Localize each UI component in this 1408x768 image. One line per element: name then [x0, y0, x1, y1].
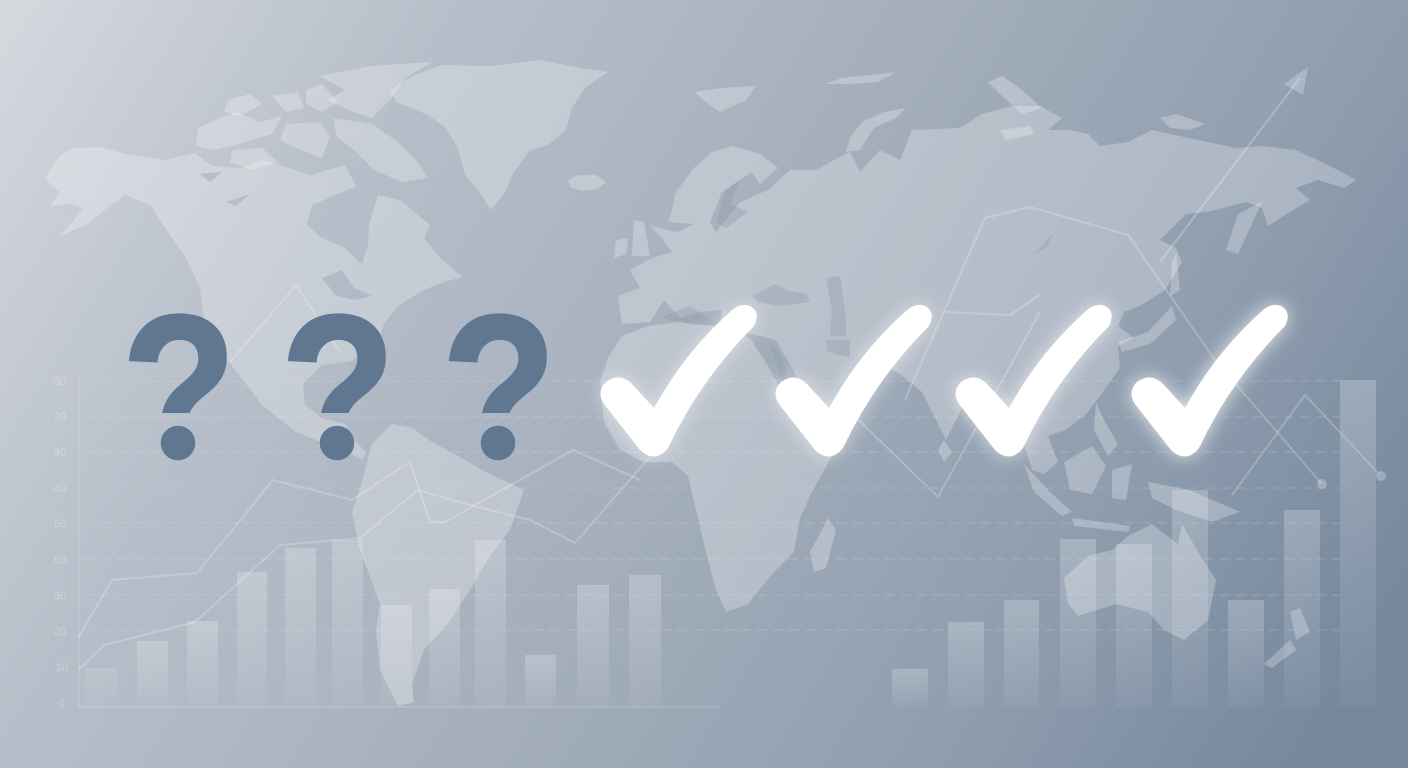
Africa	[600, 322, 846, 612]
Lake Baikal	[1034, 232, 1054, 254]
seas and lakes on the map	[200, 172, 1210, 404]
right zigzag line	[1232, 395, 1380, 495]
check marks	[600, 305, 1288, 457]
question mark 1	[128, 313, 227, 460]
left lower trend line	[78, 445, 660, 670]
Australia	[1064, 524, 1216, 640]
Iceland	[568, 175, 606, 191]
axis labels: 40	[54, 447, 66, 459]
check mark 2	[775, 305, 932, 457]
axis labels	[54, 376, 68, 710]
Baltic Sea	[716, 180, 748, 228]
question marks	[128, 313, 547, 460]
check mark 3	[955, 305, 1112, 457]
left upper trend line	[78, 450, 640, 638]
axis labels: 30	[54, 590, 66, 602]
left bar chart	[85, 540, 661, 707]
North America	[45, 147, 462, 460]
Eurasia	[618, 106, 1356, 474]
New Zealand	[1290, 608, 1310, 640]
right bar chart	[892, 380, 1376, 707]
Madagascar	[810, 518, 836, 572]
question mark 2: ?	[281, 271, 395, 510]
Japan	[1118, 306, 1176, 352]
axis labels: 20	[54, 411, 66, 423]
axis labels: 60	[54, 554, 66, 566]
South America	[352, 424, 524, 706]
Franz Josef islands	[824, 72, 896, 84]
axis labels: 20	[54, 626, 66, 638]
Great Slave Lake	[226, 194, 250, 206]
trend lines	[78, 207, 1380, 670]
question mark 3	[448, 313, 547, 460]
question mark 1: ?	[122, 271, 236, 510]
axis labels: 60	[54, 518, 66, 530]
check mark 4	[1131, 305, 1288, 457]
chart grid	[84, 381, 1340, 630]
check mark 1	[600, 305, 757, 457]
Black Sea	[752, 284, 810, 306]
Indonesia	[1024, 464, 1072, 516]
Svalbard	[694, 86, 756, 112]
upper small peak line	[230, 285, 340, 362]
Great Bear Lake	[200, 172, 222, 182]
axis labels: 30	[54, 376, 66, 388]
question mark 3: ?	[442, 271, 556, 510]
Sea of Okhotsk shadow	[1168, 212, 1210, 236]
axis labels: 0	[59, 698, 65, 710]
small inner line	[945, 295, 1040, 315]
question mark 2	[288, 313, 386, 460]
Arctic coast island Vaygach	[1000, 126, 1034, 140]
Mediterranean	[660, 306, 752, 334]
growth arrow	[1160, 67, 1308, 262]
Philippines	[1094, 402, 1118, 456]
Great Lakes	[322, 270, 372, 300]
Arctic islands	[196, 62, 432, 182]
Great Britain and Ireland	[632, 220, 650, 256]
Siberian islands	[988, 76, 1042, 114]
Greenland	[390, 60, 608, 210]
line end dots	[1317, 471, 1386, 489]
axis labels: 40	[54, 483, 66, 495]
central valley line	[838, 312, 1040, 497]
axis labels: 10	[56, 662, 68, 674]
Sakhalin and Kamchatka north	[1170, 252, 1180, 296]
central peak trend line	[905, 207, 1322, 484]
chart axes	[79, 378, 720, 707]
Persian Gulf	[826, 340, 850, 358]
Red Sea	[770, 346, 796, 404]
Caspian Sea	[826, 276, 846, 336]
world map	[45, 60, 1356, 706]
Sri Lanka	[938, 440, 952, 462]
Novaya Zemlya	[846, 108, 906, 152]
